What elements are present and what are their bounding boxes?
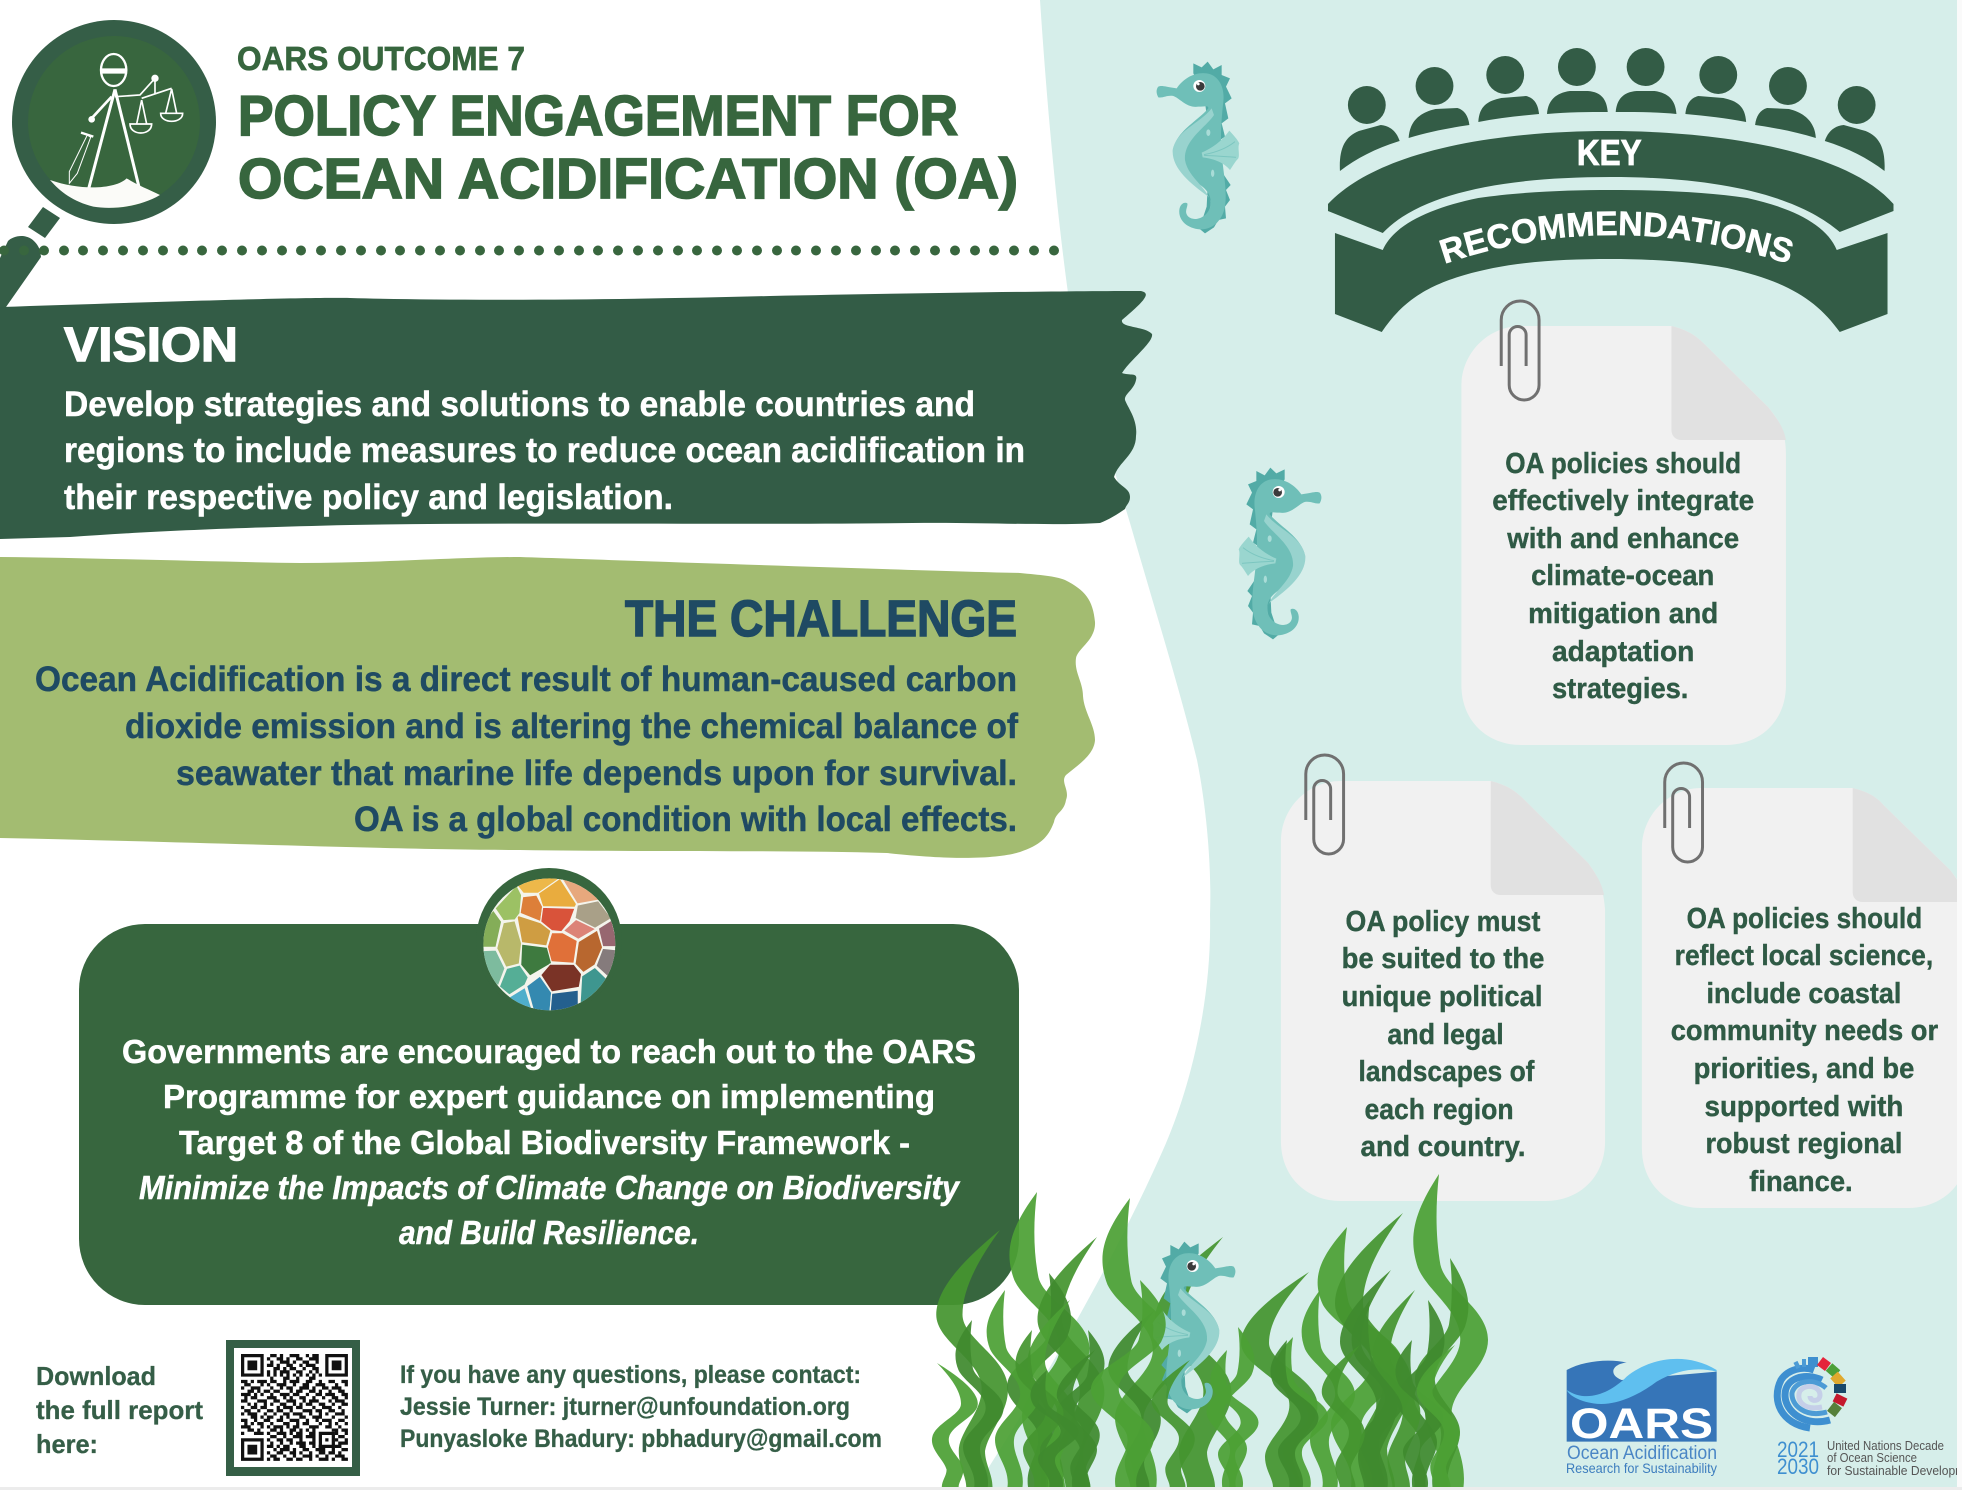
text: callout body: Programme for expert guidance on implementing (163, 1079, 935, 1116)
logo: OARS: Research for Sustainability (1566, 1460, 1717, 1476)
text: card 1 body: climate-ocean (1531, 560, 1714, 592)
text: card 3 body: finance. (1749, 1166, 1853, 1198)
text: card 3 body: robust regional (1706, 1128, 1902, 1160)
icon: paperclip (1665, 763, 1703, 862)
logo: OARS (1566, 1359, 1717, 1476)
illustration: seagrass with seahorse (932, 1174, 1488, 1487)
text: challenge body: OA is a global condition with local effects. (354, 800, 1017, 839)
text: callout body: Minimize the Impacts of Climate Change on Biodiversity (139, 1170, 961, 1207)
title: POLICY ENGAGEMENT FOR (238, 84, 958, 148)
text: download label (36, 1361, 203, 1459)
logo: UN Ocean Decade (1777, 1361, 1962, 1479)
text: challenge body (35, 660, 1018, 839)
icon: page fold (1853, 788, 1962, 902)
text: card 1 body: mitigation and (1528, 598, 1718, 630)
text: card 1 body: adaptation (1552, 636, 1694, 668)
text: card 3 body: priorities, and be (1694, 1053, 1914, 1085)
text: download label: here: (36, 1429, 98, 1459)
panel: recommendation card 3 (1642, 763, 1962, 1208)
text: challenge body: dioxide emission and is altering the chemical balance of (125, 707, 1018, 746)
text: card 2 body: unique political (1342, 981, 1542, 1013)
text: callout body (122, 1034, 976, 1252)
text: contact details: Jessie Turner: jturner@unfoundation.org (400, 1393, 850, 1421)
logo: UN Ocean Decade: 2021 (1777, 1437, 1819, 1462)
panel: recommendation card 2 (1281, 755, 1605, 1201)
text: card 2 body: be suited to the (1342, 943, 1544, 975)
text: callout body: Governments are encouraged to reach out to the OARS (122, 1034, 976, 1071)
text: contact details: If you have any questions, please contact: (400, 1361, 861, 1389)
text: RECOMMENDATIONS: RECOMMENDATIONS (1439, 211, 1793, 264)
text: vision body: Develop strategies and solutions to enable countries and (64, 385, 975, 424)
text: card 2 body: and country. (1360, 1131, 1526, 1163)
text: card 3 body: reflect local science, (1675, 940, 1933, 972)
icon: page fold (1491, 781, 1604, 895)
text: vision body (64, 385, 1025, 517)
text: card 2 body: landscapes of (1358, 1056, 1535, 1088)
text: card 1 body: effectively integrate (1492, 485, 1754, 517)
text: card 3 body: OA policies should (1687, 903, 1922, 935)
icon: paperclip (1501, 301, 1539, 400)
text: card 1 body: strategies. (1552, 673, 1688, 705)
teal wave background (975, 0, 1962, 1490)
dotted divider (0, 246, 1059, 256)
text: callout body: Target 8 of the Global Biodiversity Framework - (179, 1125, 910, 1162)
title: OARS OUTCOME 7 (237, 40, 525, 77)
text: card 2 body: each region (1364, 1094, 1514, 1126)
text: card 3 body: community needs or (1671, 1015, 1938, 1047)
text: vision body: their respective policy and legislation. (64, 478, 673, 517)
heading: vision: VISION (64, 319, 238, 372)
banner: upper arc (1328, 131, 1893, 233)
panel: vision (0, 291, 1152, 539)
text: vision body: regions to include measures to reduce ocean acidification in (64, 431, 1025, 470)
logo: UN Ocean Decade: 2030 (1777, 1454, 1819, 1479)
panel: the challenge (0, 557, 1095, 858)
text: card 2 body: and legal (1387, 1019, 1504, 1051)
banner: lower arc (1335, 190, 1888, 332)
icon: magnifying glass with justice figure (0, 20, 216, 325)
text: card 3 body (1671, 903, 1938, 1198)
icon: row of people (1340, 48, 1885, 171)
title (237, 40, 1018, 211)
text: card 1 body: with and enhance (1506, 523, 1739, 555)
panel: governments callout (79, 868, 1019, 1305)
text: download label: the full report (36, 1395, 203, 1425)
text: download label: Download (36, 1361, 156, 1391)
icon: seahorse middle (1239, 468, 1321, 639)
text: contact details: Punyasloke Bhadury: pbhadury@gmail.com (400, 1425, 882, 1453)
text: callout body: and Build Resilience. (399, 1215, 699, 1252)
heading: the challenge: THE CHALLENGE (625, 590, 1017, 647)
text: card 2 body (1342, 906, 1544, 1163)
title: OCEAN ACIDIFICATION (OA) (238, 147, 1018, 211)
logo: OARS: Ocean Acidification (1567, 1443, 1717, 1464)
heading: key recommendations banner (1328, 48, 1894, 332)
text: challenge body: seawater that marine life depends upon for survival. (176, 754, 1017, 793)
logo: OARS: OARS (1570, 1400, 1713, 1448)
logo: UN Ocean Decade: of Ocean Science (1827, 1451, 1917, 1465)
icon: seahorse top (1157, 62, 1239, 233)
icon: mosaic seal (476, 868, 622, 1014)
text: card 2 body: OA policy must (1346, 906, 1541, 938)
icon: seahorse in seagrass (1153, 1242, 1235, 1413)
text: KEY: KEY (1577, 132, 1642, 173)
text: challenge body: Ocean Acidification is a direct result of human-caused carbon (35, 660, 1017, 699)
text: card 3 body: supported with (1705, 1091, 1903, 1123)
text: card 1 body: OA policies should (1505, 448, 1741, 480)
text: card 1 body (1492, 448, 1754, 705)
panel: recommendation card 1 (1461, 301, 1786, 745)
text: contact details (400, 1361, 882, 1453)
icon: page fold (1671, 326, 1786, 440)
QR code (226, 1340, 360, 1476)
text: card 3 body: include coastal (1706, 978, 1901, 1010)
logo: UN Ocean Decade: United Nations Decade (1827, 1439, 1944, 1453)
icon: paperclip (1306, 755, 1344, 854)
